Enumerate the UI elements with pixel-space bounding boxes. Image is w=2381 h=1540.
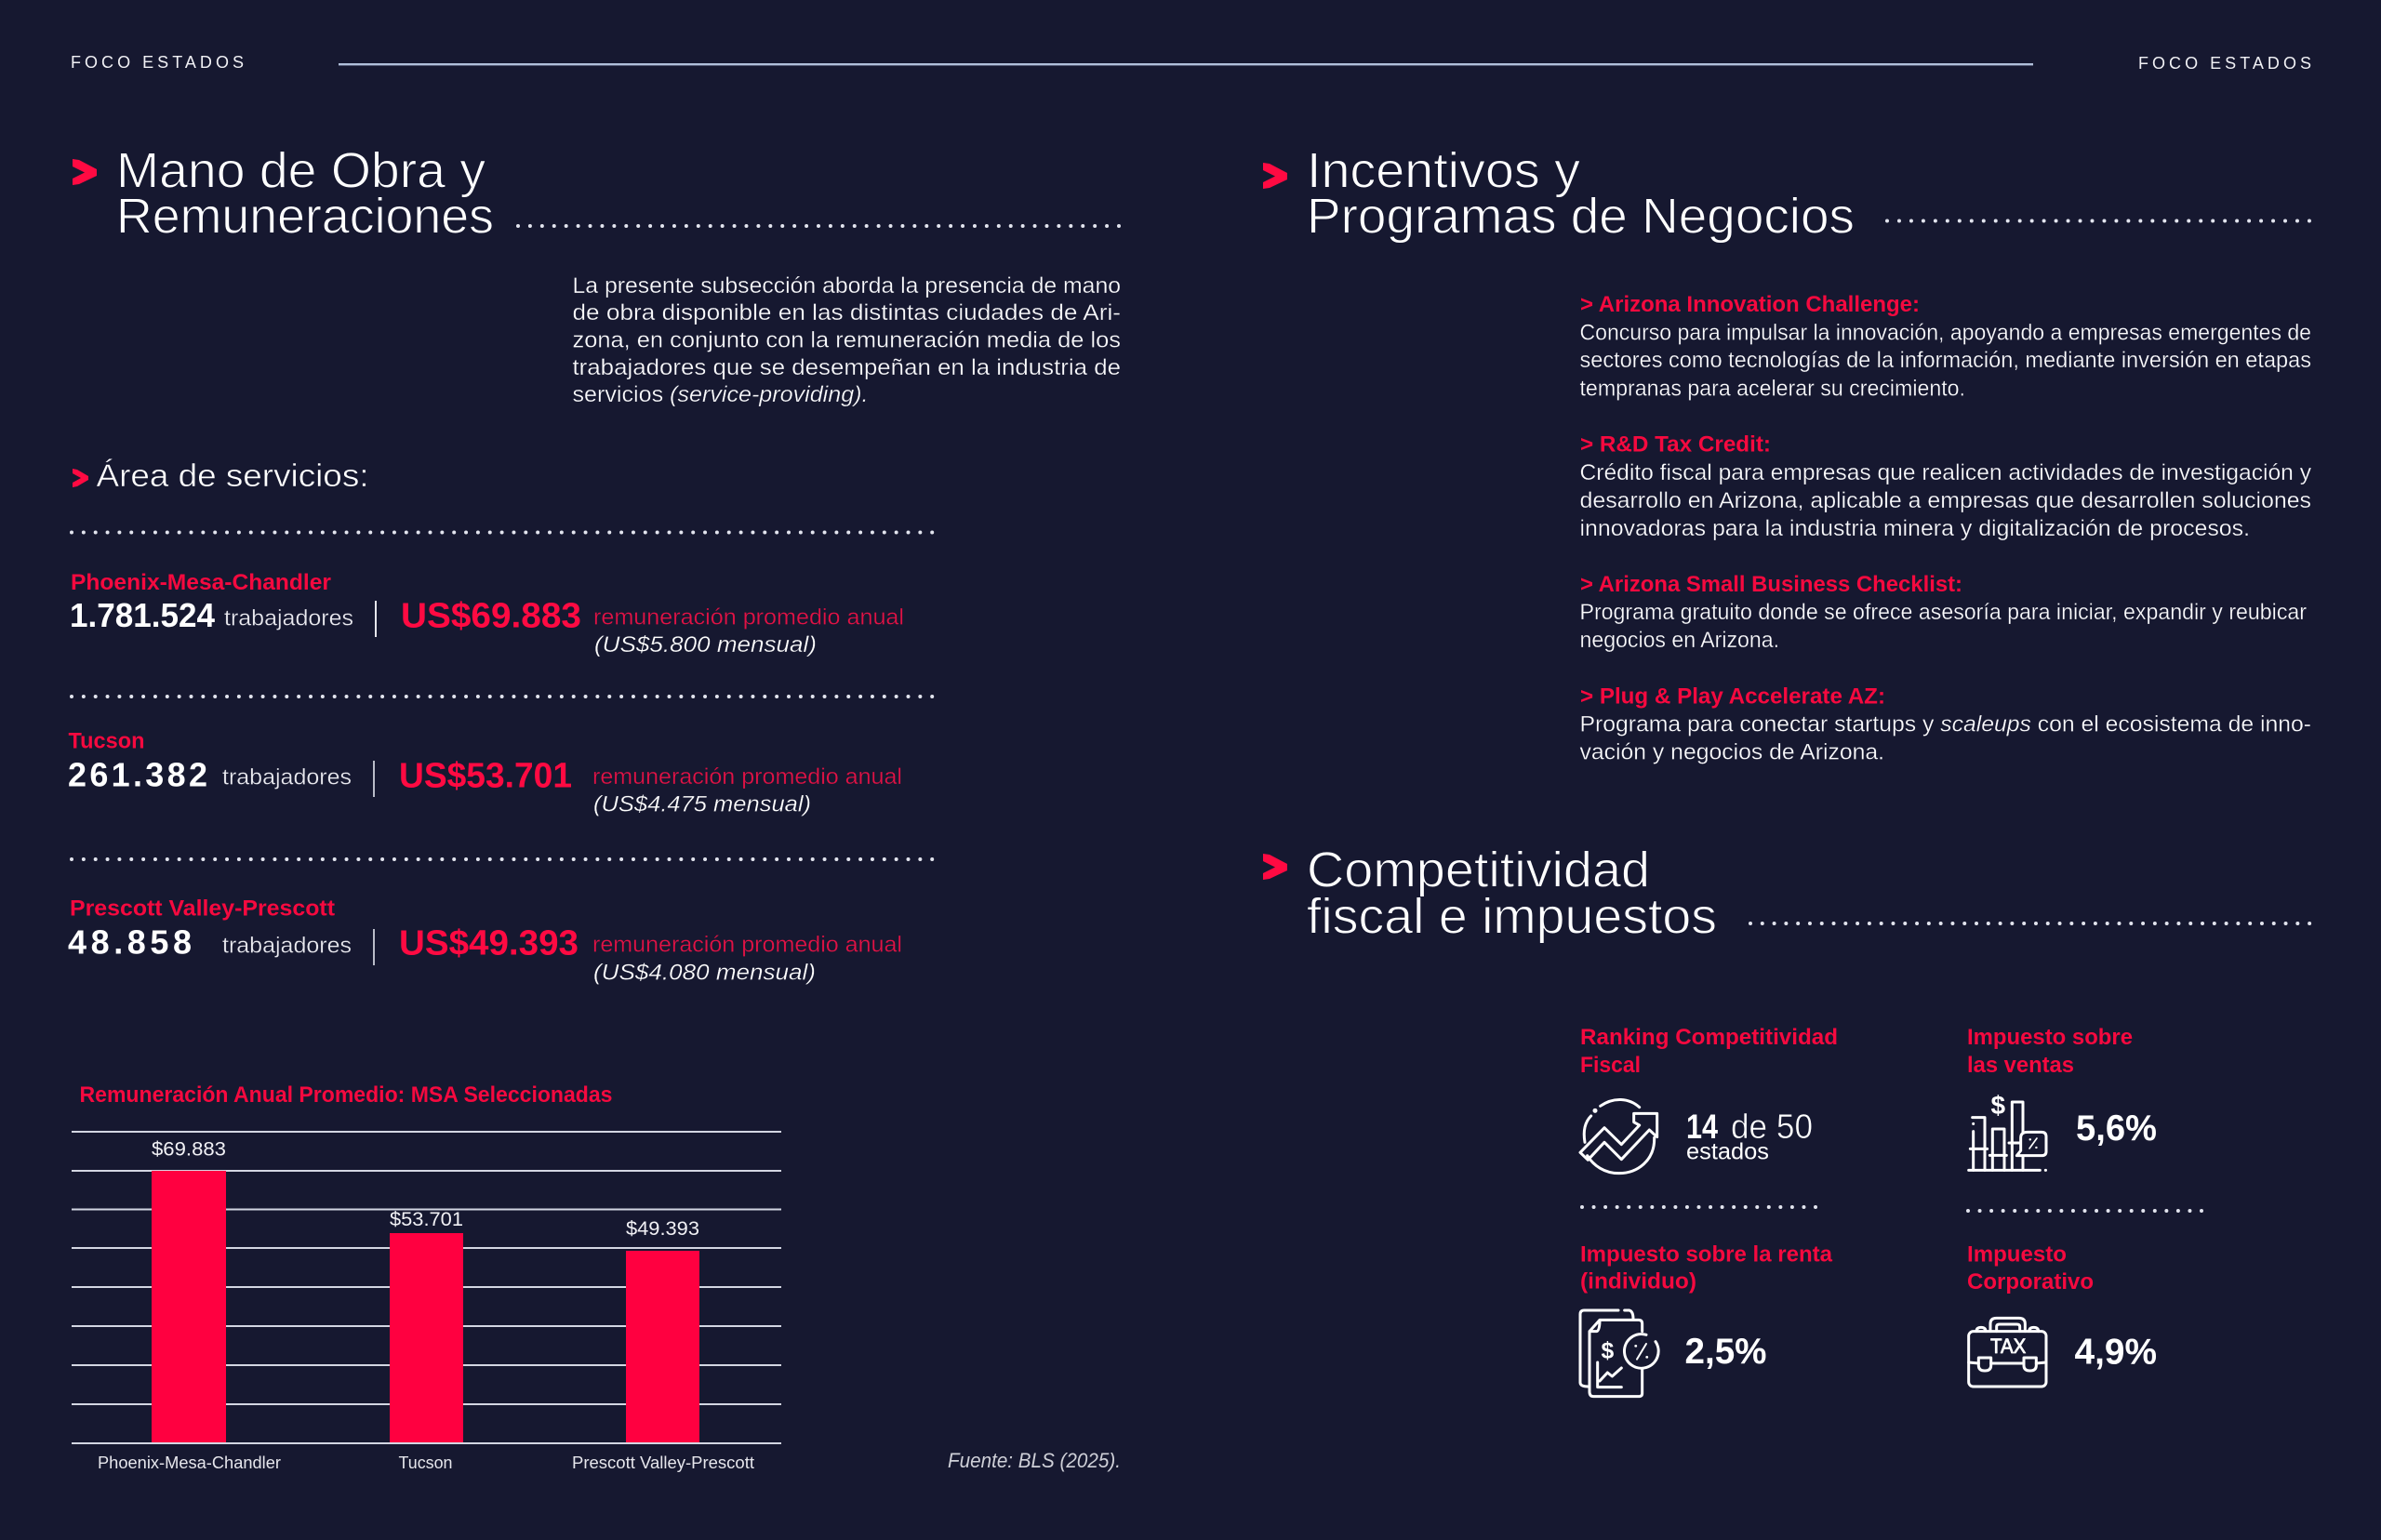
heading: mano de obra: Mano de Obra y: [116, 143, 486, 199]
program: arizona innovation challenge: Concurso para impulsar la innovación, apoyando a empresas emergentes de: [1579, 320, 2311, 346]
heading: competitividad: Competitividad: [1307, 843, 1650, 898]
stat: ranking: de 50: [1731, 1108, 1813, 1146]
row: prescott: remuneración promedio anual: [592, 932, 902, 958]
row: prescott: (US$4.080 mensual): [593, 960, 816, 986]
program: r&d tax credit: [1579, 431, 2311, 541]
row: phoenix: (US$5.800 mensual): [594, 632, 817, 657]
header rule: [339, 63, 2033, 65]
program: small business checklist: Programa gratuito donde se ofrece asesoría para iniciar, expandir y reubicar: [1579, 600, 2307, 625]
category labels: Prescott Valley-Prescott: [572, 1454, 754, 1472]
stat: impuesto sobre la renta: (individuo): [1580, 1268, 1696, 1294]
stat: impuesto corporativo: 4,9%: [2074, 1332, 2157, 1373]
category labels: Phoenix-Mesa-Chandler: [98, 1454, 281, 1472]
program: r&d tax credit: innovadoras para la industria minera y digitalización de procesos.: [1579, 516, 2250, 541]
row: prescott: Prescott Valley-Prescott: [70, 896, 335, 921]
row: tucson: Tucson: [69, 729, 145, 753]
stat: impuesto sobre las ventas: Impuesto sobre: [1967, 1025, 2133, 1050]
icon: tax briefcase: TAX: [1990, 1334, 2027, 1358]
stat: ranking: 14: [1686, 1108, 1718, 1146]
panel: mano de obra y remuneraciones: [68, 143, 1121, 1472]
icon: bars with percent tag: $: [1991, 1091, 2006, 1120]
bar: prescott: [626, 1251, 699, 1442]
heading: incentivos: Programas de Negocios: [1307, 188, 1855, 244]
program: small business checklist: > Arizona Small Business Checklist:: [1580, 572, 1962, 597]
stat: impuesto corporativo: Corporativo: [1967, 1269, 2094, 1294]
bar: phoenix: [152, 1171, 226, 1442]
category labels: [98, 1454, 754, 1472]
icon: bars with percent tag: [1969, 1091, 2046, 1170]
header label left: FOCO ESTADOS: [71, 53, 244, 72]
heading: mano de obra: Remuneraciones: [116, 188, 494, 244]
stat: ranking: estados: [1686, 1138, 1769, 1164]
header label right: FOCO ESTADOS: [2138, 54, 2311, 73]
program: small business checklist: negocios en Arizona.: [1579, 628, 1779, 653]
header: [71, 53, 2311, 73]
stat: impuesto sobre las ventas: [1967, 1025, 2157, 1170]
program: r&d tax credit: desarrollo en Arizona, aplicable a empresas que desarrollen soluciones: [1579, 488, 2311, 513]
stat: impuesto sobre la renta: Impuesto sobre la renta: [1580, 1242, 1833, 1267]
value labels: $49.393: [626, 1218, 699, 1240]
stat: impuesto sobre las ventas: 5,6%: [2076, 1109, 2157, 1148]
intro text block: de obra disponible en las distintas ciudades de Ari-: [573, 300, 1121, 325]
intro text block: [573, 273, 1121, 407]
row: phoenix: US$69.883: [401, 597, 581, 636]
row: phoenix: trabajadores: [224, 606, 353, 631]
category labels: Tucson: [398, 1454, 452, 1472]
heading: incentivos: [1263, 143, 2310, 244]
row: phoenix: 1.781.524: [70, 596, 215, 634]
row: phoenix: [70, 570, 904, 657]
row: phoenix: Phoenix-Mesa-Chandler: [71, 570, 331, 595]
heading: competitividad: fiscal e impuestos: [1307, 889, 1717, 945]
source note: Fuente: BLS (2025).: [948, 1449, 1121, 1472]
program: r&d tax credit: > R&D Tax Credit:: [1580, 431, 1771, 458]
panel: competitividad fiscal: [1263, 843, 2310, 1397]
intro text block: servicios (service-providing).: [573, 382, 869, 407]
stat: ranking: [1580, 1025, 1838, 1174]
stat: impuesto corporativo: [1967, 1242, 2157, 1387]
bar: tucson: [390, 1233, 463, 1442]
stat: ranking: Fiscal: [1580, 1053, 1641, 1078]
heading: mano de obra: [73, 143, 1120, 244]
chart title: Remuneración Anual Promedio: MSA Seleccionadas: [80, 1082, 612, 1108]
intro text block: trabajadores que se desempeñan en la industria de: [573, 355, 1121, 380]
row: prescott: 48.858: [68, 923, 192, 962]
icon: tax briefcase: [1969, 1318, 2046, 1387]
heading: competitividad: [1263, 843, 2310, 945]
row: tucson: trabajadores: [222, 764, 352, 790]
row: tucson: US$53.701: [399, 757, 572, 796]
row: tucson: 261.382: [68, 755, 207, 794]
bar chart: [72, 1082, 781, 1472]
program: arizona innovation challenge: [1579, 292, 2311, 402]
heading: incentivos: Incentivos y: [1307, 143, 1580, 199]
value labels: [152, 1138, 699, 1240]
stat: impuesto sobre las ventas: las ventas: [1967, 1053, 2074, 1078]
program: plug and play: vación y negocios de Arizona.: [1579, 740, 1884, 764]
program: plug and play: [1579, 684, 2311, 764]
program: plug and play: Programa para conectar startups y scaleups con el ecosistema de inno-: [1579, 712, 2311, 737]
icon: document with percent: $: [1601, 1338, 1614, 1363]
row: prescott: [68, 896, 902, 986]
row: phoenix: remuneración promedio anual: [593, 604, 904, 631]
row: prescott: US$49.393: [399, 924, 579, 963]
intro text block: La presente subsección aborda la presencia de mano: [573, 273, 1121, 299]
row: prescott: trabajadores: [222, 934, 352, 958]
icon: growth arrow in circle: [1580, 1099, 1657, 1174]
stat: impuesto sobre la renta: 2,5%: [1685, 1332, 1767, 1372]
program: arizona innovation challenge: sectores como tecnologías de la información, mediante inversión en etapas: [1579, 348, 2311, 373]
row: tucson: [68, 729, 902, 816]
value labels: $53.701: [390, 1209, 463, 1230]
panel: incentivos y programas: [1263, 143, 2311, 764]
row: tucson: remuneración promedio anual: [592, 764, 902, 790]
value labels: $69.883: [152, 1138, 226, 1161]
program: r&d tax credit: Crédito fiscal para empresas que realicen actividades de investigación y: [1579, 460, 2311, 485]
stat: ranking: Ranking Competitividad: [1580, 1025, 1838, 1050]
icon: document with percent: [1580, 1310, 1658, 1397]
stat: impuesto corporativo: Impuesto: [1967, 1242, 2067, 1267]
program: arizona innovation challenge: tempranas para acelerar su crecimiento.: [1579, 376, 1965, 402]
program: small business checklist: [1579, 572, 2307, 653]
stat: impuesto sobre la renta: [1580, 1242, 1833, 1397]
row: tucson: (US$4.475 mensual): [593, 792, 811, 816]
program: arizona innovation challenge: > Arizona Innovation Challenge:: [1580, 292, 1920, 317]
program: plug and play: > Plug & Play Accelerate AZ:: [1580, 684, 1885, 709]
intro text block: zona, en conjunto con la remuneración media de los: [573, 327, 1121, 353]
subheading: area de servicios: Área de servicios:: [97, 458, 368, 494]
